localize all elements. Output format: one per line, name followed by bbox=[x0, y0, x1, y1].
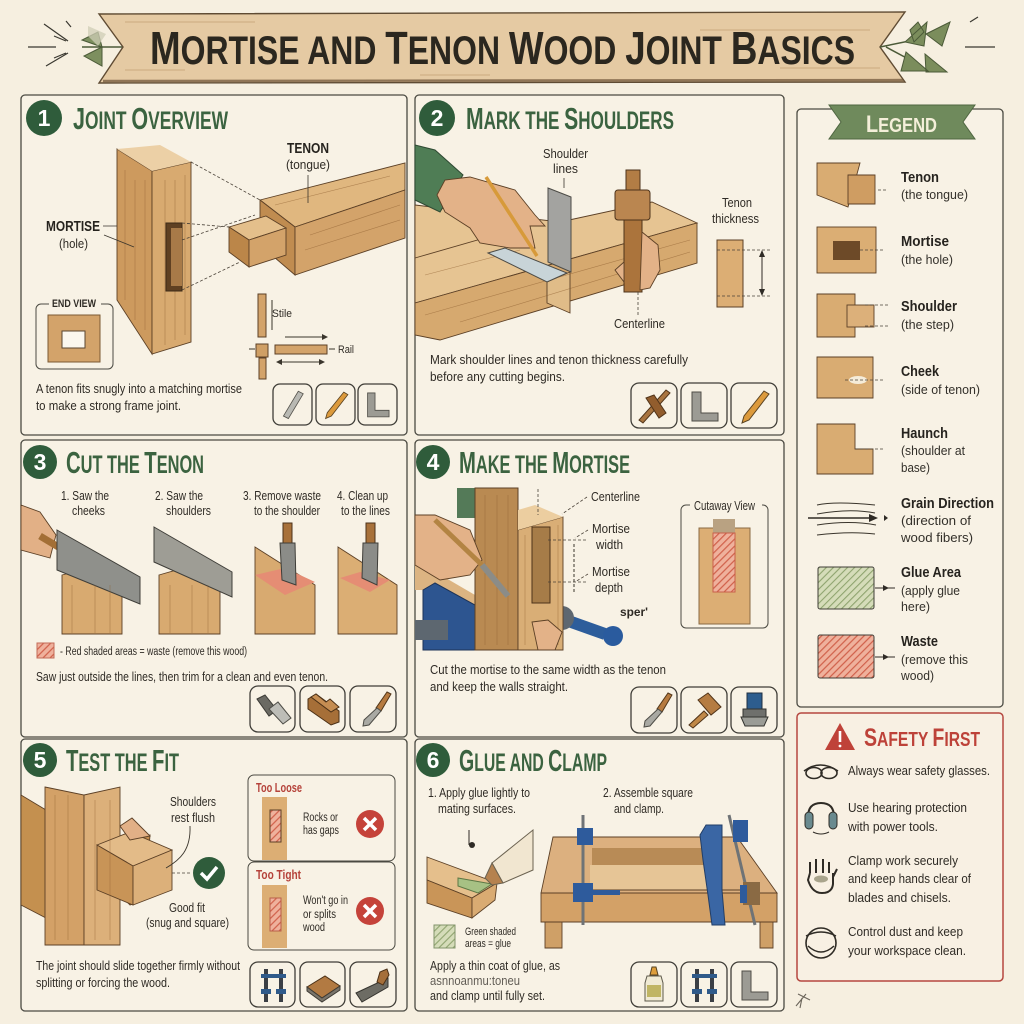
safety item: hand: blades and chisels. bbox=[848, 891, 951, 905]
assembled joint bbox=[21, 787, 172, 945]
caption: The joint should slide together firmly without bbox=[36, 959, 240, 973]
clamped frame bbox=[541, 815, 777, 948]
safety item: hearing protection: with power tools. bbox=[847, 820, 938, 834]
too tight box: wood bbox=[302, 922, 325, 934]
glue key: Green shaded bbox=[465, 926, 516, 938]
legend panel bbox=[797, 105, 1003, 707]
marking gauge bbox=[615, 170, 660, 292]
mortise dimension labels: Mortise bbox=[592, 565, 630, 579]
safety item: dust mask bbox=[806, 925, 966, 958]
safety item: hand bbox=[808, 854, 971, 905]
label: good fit: (snug and square) bbox=[146, 916, 229, 930]
mortise post bbox=[117, 145, 191, 354]
heading: glue and clamp: GLUE AND CLAMP bbox=[459, 743, 607, 778]
too tight box: Too Tight bbox=[256, 867, 302, 882]
legend item: tenon bbox=[817, 163, 968, 207]
tool icons bbox=[250, 962, 396, 1007]
legend item: tenon: (the tongue) bbox=[901, 187, 968, 202]
step 6 badge: 6 bbox=[427, 747, 439, 773]
small corner doodle bbox=[796, 994, 810, 1008]
step 2 badge: 2 bbox=[431, 105, 443, 131]
legend item: grain direction: wood fibers) bbox=[900, 530, 973, 545]
step 3 badge: 3 bbox=[34, 449, 46, 475]
step 4 badge: 4 bbox=[427, 449, 440, 475]
step labels: shoulders bbox=[166, 504, 211, 518]
legend item: waste: wood) bbox=[900, 668, 934, 683]
safety item: hearing protection: Use hearing protection bbox=[848, 801, 967, 815]
caption: to make a strong frame joint. bbox=[36, 399, 181, 413]
too tight box: or splits bbox=[303, 909, 336, 921]
steel square bbox=[488, 188, 571, 282]
step 3 badge bbox=[23, 445, 57, 479]
legend item: glue area bbox=[818, 565, 962, 614]
step 6 badge bbox=[416, 743, 450, 777]
legend item: haunch: (shoulder at bbox=[901, 443, 965, 458]
heading: test the fit: TEST THE FIT bbox=[66, 743, 179, 778]
step 5 badge: 5 bbox=[34, 747, 47, 773]
hands and chisel bbox=[415, 515, 562, 650]
too tight box bbox=[248, 862, 395, 950]
step 2 badge bbox=[419, 100, 455, 136]
step 4 badge bbox=[416, 445, 450, 479]
caption: and keep the walls straight. bbox=[430, 680, 568, 694]
legend item: haunch bbox=[817, 424, 965, 475]
step 5 badge bbox=[23, 743, 57, 777]
panel 1: joint overview bbox=[21, 95, 407, 435]
label: mortise: (hole) bbox=[59, 237, 88, 251]
step labels: 2. Saw the bbox=[155, 489, 203, 503]
legend ribbon bbox=[829, 105, 975, 139]
tenon thickness diagram bbox=[712, 196, 770, 307]
caption: Apply a thin coat of glue, as bbox=[430, 959, 560, 973]
caption bbox=[36, 959, 240, 990]
waste key bbox=[37, 643, 247, 658]
label: tenon: (tongue) bbox=[286, 158, 330, 172]
heading: cut the tenon: CUT THE TENON bbox=[66, 445, 204, 480]
step labels: to the lines bbox=[341, 504, 390, 518]
end view inset bbox=[36, 297, 113, 369]
legend item: mortise: Mortise bbox=[901, 234, 949, 250]
legend item: shoulder: (the step) bbox=[901, 317, 954, 332]
panel 2: mark the shoulders bbox=[415, 95, 784, 435]
legend item: glue area: Glue Area bbox=[901, 565, 962, 581]
step labels: and clamp. bbox=[614, 802, 664, 816]
legend item: glue area: here) bbox=[901, 599, 930, 614]
panel 6: glue and clamp bbox=[415, 739, 784, 1011]
caption: before any cutting begins. bbox=[430, 370, 565, 384]
legend item: glue area: (apply glue bbox=[901, 583, 960, 598]
step 1 badge bbox=[26, 100, 62, 136]
tool icons bbox=[273, 384, 397, 425]
projection lines bbox=[182, 162, 260, 290]
title text: MORTISE AND TENON WOOD JOINT BASICS bbox=[150, 22, 855, 74]
tool icons bbox=[631, 687, 777, 733]
icon: warning triangle bbox=[825, 723, 855, 750]
label: centerline bbox=[614, 292, 665, 331]
safety item: dust mask: Control dust and keep bbox=[848, 925, 963, 939]
too loose box: Rocks or bbox=[303, 812, 338, 824]
caption: A tenon fits snugly into a matching mortise bbox=[36, 382, 242, 396]
step labels: 1. Apply glue lightly to bbox=[428, 786, 530, 800]
label: mortise: MORTISE bbox=[46, 219, 100, 235]
bench vise bbox=[415, 583, 623, 650]
tenon thickness diagram: Tenon bbox=[722, 196, 752, 210]
legend ribbon: LEGEND bbox=[866, 111, 937, 138]
step 4 cleaning up bbox=[338, 523, 397, 634]
tool icons bbox=[631, 962, 777, 1007]
safety item: hearing protection bbox=[805, 801, 967, 834]
stile and rail diagram: Rail bbox=[338, 344, 354, 356]
left leaf sprig bbox=[28, 21, 122, 66]
legend item: shoulder bbox=[817, 294, 957, 337]
caption: asnnoanmu:toneu bbox=[430, 974, 520, 988]
label: tenon bbox=[286, 141, 330, 203]
legend item: tenon: Tenon bbox=[901, 170, 939, 186]
label: tenon: TENON bbox=[287, 141, 329, 157]
legend item: grain direction: (direction of bbox=[901, 513, 971, 528]
caption: Cut the mortise to the same width as the tenon bbox=[430, 663, 666, 677]
legend item: cheek: Cheek bbox=[901, 364, 940, 380]
label: good fit bbox=[146, 901, 229, 930]
good fit check bbox=[172, 857, 225, 889]
legend item: cheek bbox=[817, 357, 980, 398]
tool icons bbox=[250, 686, 396, 732]
heading: mark the shoulders: MARK THE SHOULDERS bbox=[466, 101, 674, 136]
tenon rail bbox=[229, 163, 405, 275]
legend item: mortise: (the hole) bbox=[901, 252, 953, 267]
heading: joint overview: JOINT OVERVIEW bbox=[73, 101, 228, 136]
step labels: mating surfaces. bbox=[438, 802, 516, 816]
step labels bbox=[428, 786, 693, 816]
stile and rail diagram bbox=[249, 294, 354, 379]
stray mark: sper' bbox=[620, 605, 648, 619]
legend item: waste: Waste bbox=[901, 634, 938, 650]
label: good fit: Good fit bbox=[169, 901, 205, 915]
step labels: to the shoulder bbox=[254, 504, 320, 518]
workpiece post with mortise bbox=[457, 488, 563, 650]
mortise dimension labels bbox=[538, 489, 640, 595]
heading: safety first: SAFETY FIRST bbox=[864, 724, 980, 752]
caption bbox=[36, 382, 242, 413]
glue key bbox=[434, 925, 516, 950]
legend item: waste: (remove this bbox=[901, 652, 968, 667]
caption bbox=[430, 959, 560, 1003]
legend item: shoulder: Shoulder bbox=[901, 299, 957, 315]
too loose box: has gaps bbox=[303, 825, 339, 837]
stile and rail diagram: Stile bbox=[272, 308, 292, 320]
tenon thickness diagram: thickness bbox=[712, 212, 759, 226]
panel 5: test the fit bbox=[21, 739, 407, 1011]
too loose box bbox=[248, 775, 395, 861]
too tight box: Won't go in bbox=[303, 895, 348, 907]
step labels: 4. Clean up bbox=[337, 489, 388, 503]
legend item: grain direction: Grain Direction bbox=[901, 496, 994, 512]
legend item: waste bbox=[818, 634, 968, 683]
label: mortise bbox=[46, 219, 134, 251]
legend item: haunch: Haunch bbox=[901, 426, 948, 442]
step 1 sawing the cheeks bbox=[21, 505, 140, 634]
sleeve and marking hand bbox=[415, 145, 545, 256]
legend item: cheek: (side of tenon) bbox=[901, 382, 980, 397]
label: shoulders rest flush: rest flush bbox=[171, 811, 215, 825]
caption bbox=[430, 353, 689, 384]
panel 4: make the mortise bbox=[415, 440, 784, 737]
mortise dimension labels: width bbox=[595, 538, 623, 552]
label: shoulders rest flush: Shoulders bbox=[170, 795, 216, 809]
legend item: mortise bbox=[817, 227, 953, 273]
step 1 badge: 1 bbox=[38, 105, 51, 131]
caption bbox=[430, 663, 666, 694]
step labels: cheeks bbox=[72, 504, 105, 518]
tool icons bbox=[631, 383, 777, 428]
step 3 chisel waste bbox=[255, 523, 315, 634]
cutaway view: Cutaway View bbox=[694, 499, 756, 513]
end view inset: END VIEW bbox=[52, 298, 96, 310]
label: shoulder lines bbox=[543, 147, 588, 188]
right leaf sprig bbox=[880, 17, 995, 72]
glue application bbox=[427, 830, 533, 918]
workpiece bbox=[415, 202, 697, 340]
step labels: 3. Remove waste bbox=[243, 489, 321, 503]
step 2 sawing the shoulders bbox=[154, 527, 232, 634]
backing board bbox=[415, 560, 475, 620]
safety item: hand: Clamp work securely bbox=[848, 854, 959, 868]
safety panel bbox=[797, 713, 1003, 981]
heading: make the mortise: MAKE THE MORTISE bbox=[459, 445, 630, 480]
label: shoulder lines: Shoulder bbox=[543, 147, 588, 161]
safety item: dust mask: your workspace clean. bbox=[848, 944, 966, 958]
label: shoulders rest flush bbox=[166, 795, 216, 868]
mortise dimension labels: Mortise bbox=[592, 522, 630, 536]
caption: Saw just outside the lines, then trim for a clean and even tenon. bbox=[36, 670, 328, 684]
step labels: 1. Saw the bbox=[61, 489, 109, 503]
step labels bbox=[61, 489, 390, 518]
label: centerline: Centerline bbox=[614, 317, 665, 331]
title banner bbox=[99, 12, 905, 83]
caption: and clamp until fully set. bbox=[430, 989, 545, 1003]
legend item: grain direction bbox=[808, 496, 994, 545]
waste key: - Red shaded areas = waste (remove this wood) bbox=[60, 646, 247, 658]
safety item: glasses bbox=[804, 764, 990, 778]
safety item: hand: and keep hands clear of bbox=[848, 872, 971, 886]
mortise dimension labels: Centerline bbox=[591, 490, 640, 504]
label: shoulder lines: lines bbox=[553, 162, 578, 176]
step labels: 2. Assemble square bbox=[603, 786, 693, 800]
safety item: glasses: Always wear safety glasses. bbox=[848, 764, 990, 778]
too loose box: Too Loose bbox=[256, 780, 302, 795]
panel 3: cut the tenon bbox=[21, 440, 407, 737]
mortise dimension labels: depth bbox=[595, 581, 623, 595]
cutaway view bbox=[681, 498, 768, 628]
caption: Mark shoulder lines and tenon thickness carefully bbox=[430, 353, 689, 367]
glue key: areas = glue bbox=[465, 938, 511, 950]
caption: splitting or forcing the wood. bbox=[36, 976, 170, 990]
legend item: haunch: base) bbox=[901, 460, 930, 475]
